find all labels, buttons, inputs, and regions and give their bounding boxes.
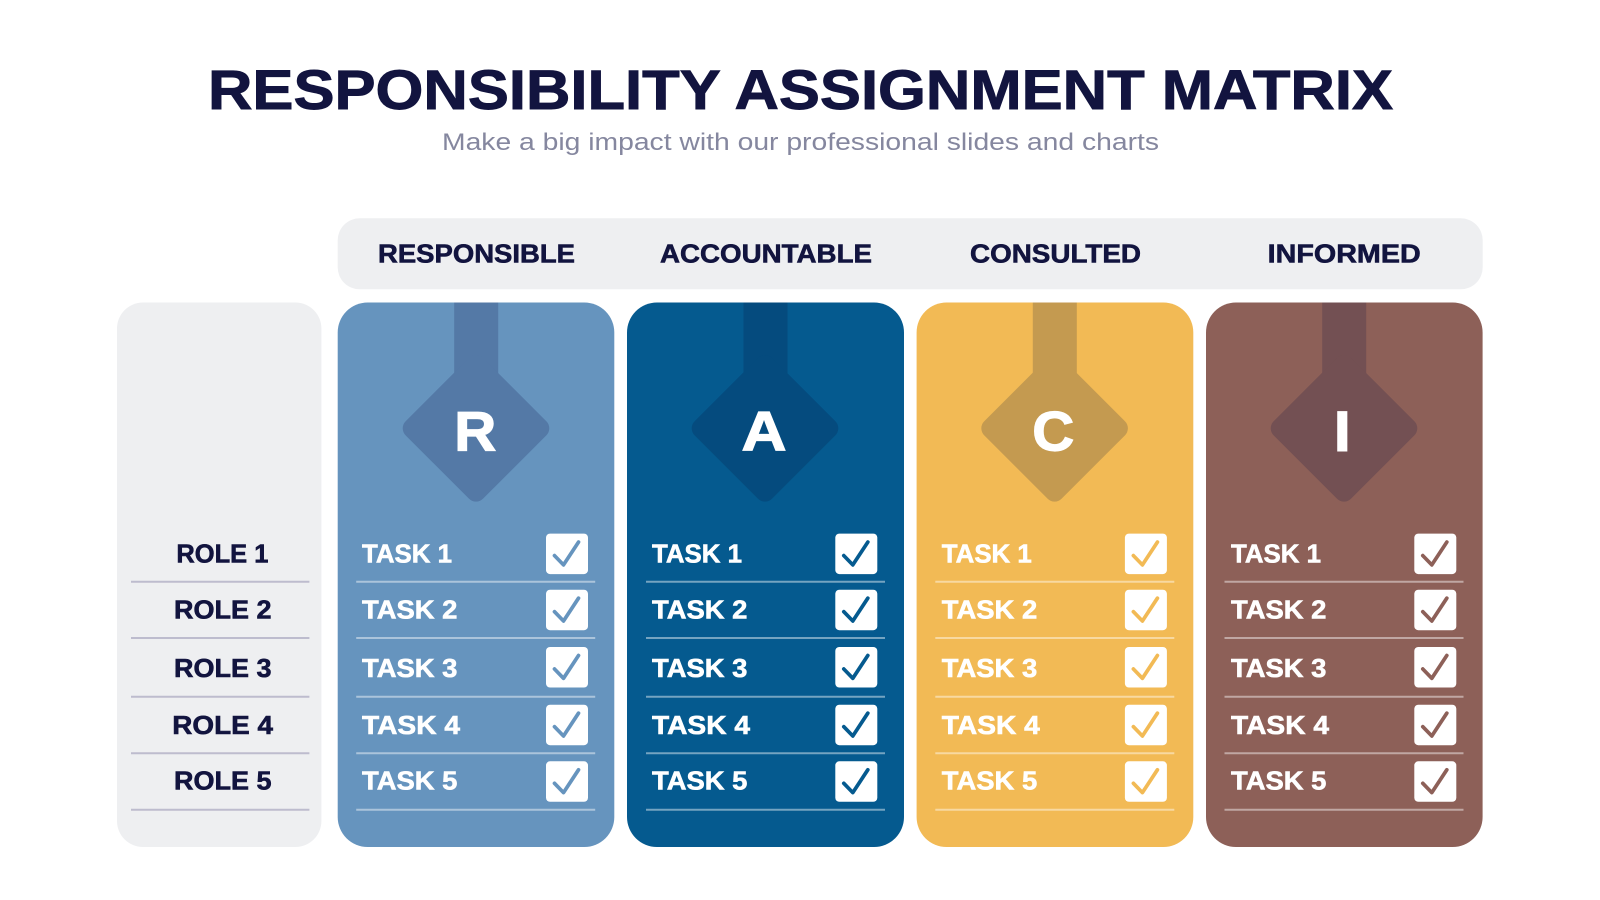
icon: A diamond (688, 302, 842, 506)
task 3: TASK 3 (1231, 655, 1326, 683)
icon: I diamond (1267, 302, 1421, 506)
task 5: TASK 5 (1231, 767, 1326, 795)
checkbox 4 (835, 705, 877, 745)
checkbox 1 (546, 534, 588, 574)
task 2: TASK 2 (942, 597, 1037, 625)
checkbox 3 (1414, 647, 1456, 688)
task 4: TASK 4 (942, 712, 1041, 740)
icon: C diamond (977, 302, 1132, 506)
checkbox 4 (546, 705, 588, 745)
subtitle: Make a big impact with our professional slides and charts (442, 129, 1159, 156)
icon: R diamond: R (454, 400, 496, 463)
role 3: ROLE 3 (174, 655, 272, 683)
checkbox 2 (546, 590, 588, 630)
checkbox 5 (546, 761, 588, 802)
checkbox 5 (835, 761, 877, 802)
icon: I diamond: I (1335, 400, 1350, 463)
panel: informed (1206, 302, 1483, 847)
header: responsible: RESPONSIBLE (378, 241, 575, 269)
role 4: ROLE 4 (172, 712, 274, 740)
role 5: ROLE 5 (174, 767, 272, 795)
checkbox 2 (1125, 590, 1167, 630)
task 3: TASK 3 (942, 655, 1037, 683)
task 1: TASK 1 (942, 541, 1032, 569)
task 1: TASK 1 (1231, 541, 1321, 569)
task 2: TASK 2 (652, 597, 747, 625)
task 4: TASK 4 (652, 712, 751, 740)
header: informed: INFORMED (1268, 241, 1421, 269)
task 4: TASK 4 (1231, 712, 1330, 740)
title: RESPONSIBILITY ASSIGNMENT MATRIX (208, 58, 1393, 121)
task 2: TASK 2 (1231, 597, 1326, 625)
checkbox 2 (835, 590, 877, 630)
task 1: TASK 1 (652, 541, 742, 569)
task 2: TASK 2 (362, 597, 457, 625)
checkbox 3 (1125, 647, 1167, 688)
panel: roles (117, 302, 321, 847)
task 5: TASK 5 (942, 767, 1037, 795)
checkbox 4 (1125, 705, 1167, 745)
task 4: TASK 4 (362, 712, 461, 740)
panel: responsible (338, 302, 614, 847)
header band (338, 218, 1483, 289)
panel: consulted (917, 302, 1193, 847)
task 3: TASK 3 (362, 655, 457, 683)
role 1: ROLE 1 (176, 541, 268, 569)
checkbox 4 (1414, 705, 1456, 745)
icon: A diamond: A (742, 400, 786, 463)
role 2: ROLE 2 (174, 597, 272, 625)
task 5: TASK 5 (362, 767, 457, 795)
checkbox 3 (835, 647, 877, 688)
checkbox 1 (835, 534, 877, 574)
icon: R diamond (399, 302, 553, 506)
panel: accountable (627, 302, 904, 847)
checkbox 1 (1414, 534, 1456, 574)
task 5: TASK 5 (652, 767, 747, 795)
task 3: TASK 3 (652, 655, 747, 683)
header: accountable: ACCOUNTABLE (660, 241, 872, 269)
checkbox 2 (1414, 590, 1456, 630)
icon: C diamond: C (1032, 400, 1074, 463)
header: consulted: CONSULTED (970, 241, 1141, 269)
task 1: TASK 1 (362, 541, 452, 569)
checkbox 5 (1125, 761, 1167, 802)
checkbox 1 (1125, 534, 1167, 574)
checkbox 5 (1414, 761, 1456, 802)
checkbox 3 (546, 647, 588, 688)
